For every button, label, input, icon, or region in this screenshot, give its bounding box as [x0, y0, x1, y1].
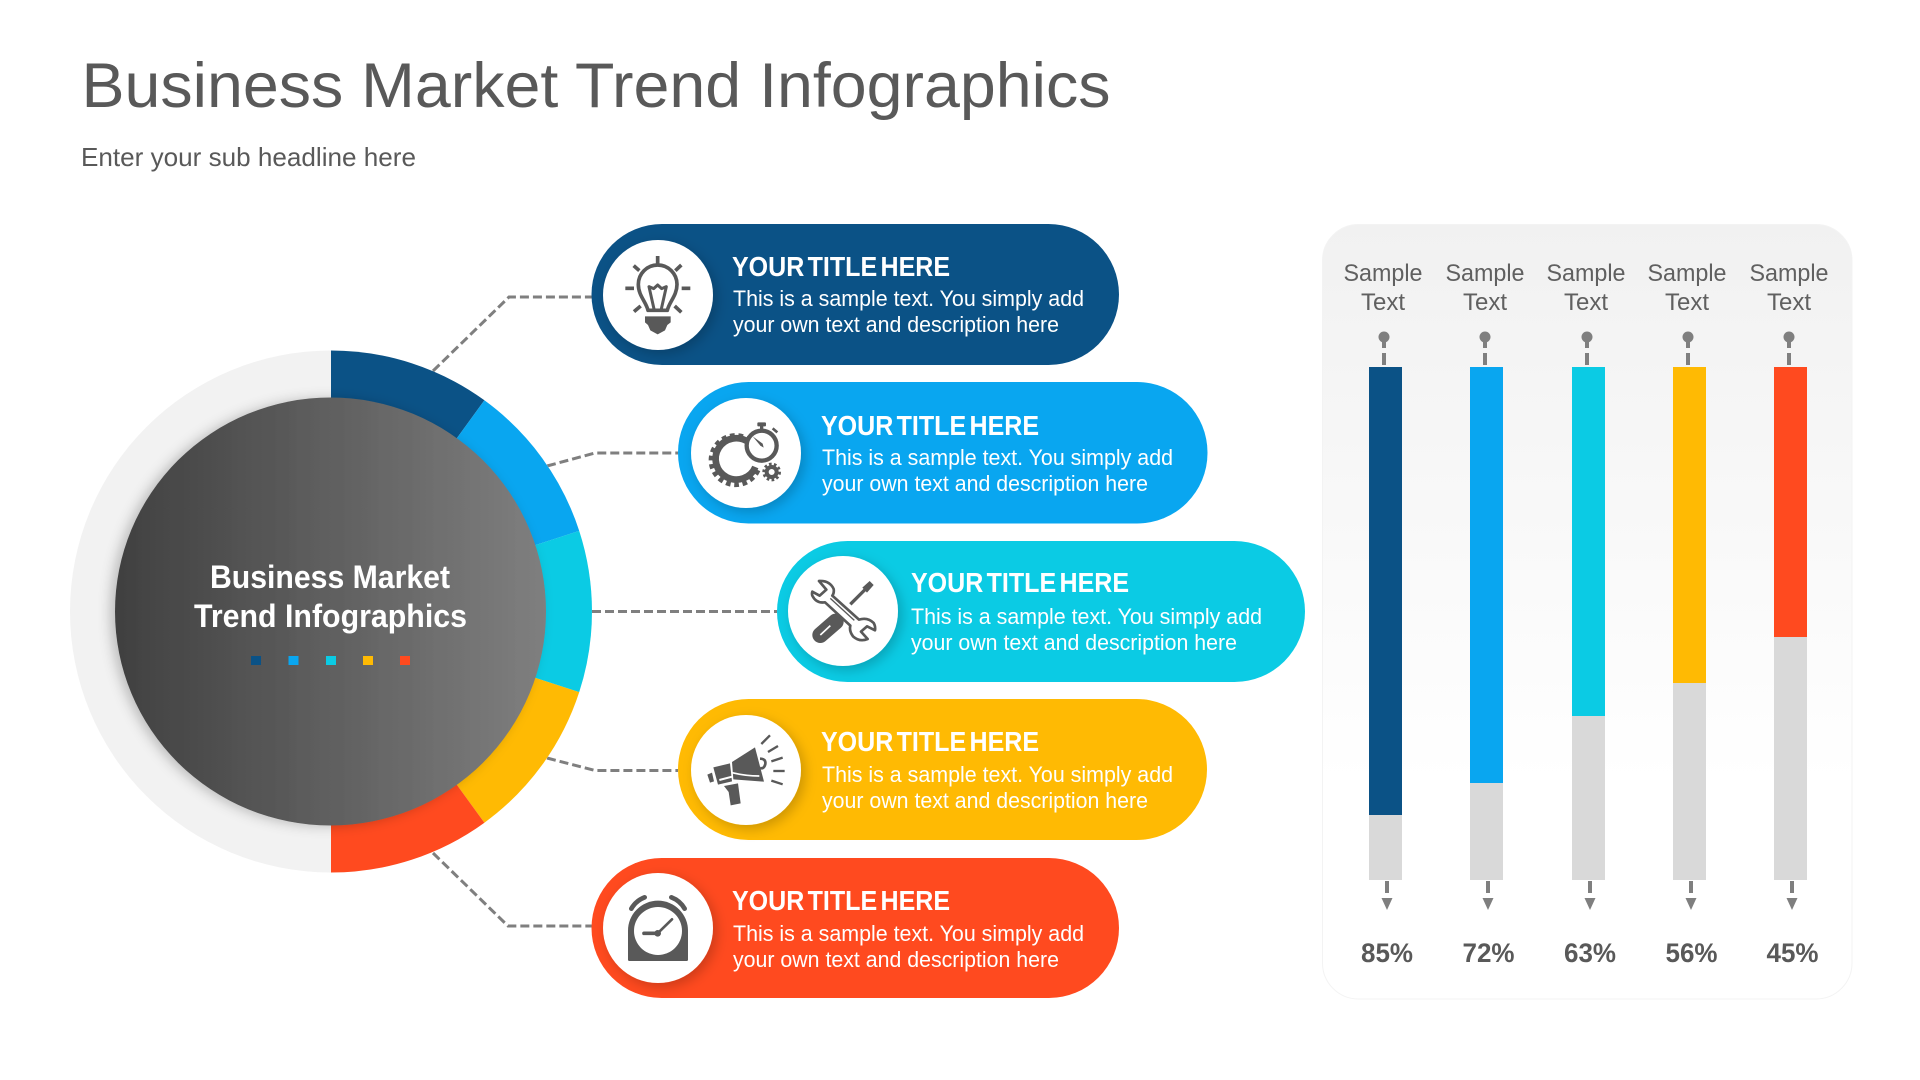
pill text: your own text and description here: [733, 947, 1059, 972]
bar column 5: 45%: [1766, 938, 1818, 968]
pill text: [732, 251, 1084, 337]
pill text: your own text and description here: [911, 630, 1237, 655]
pill text: YOUR TITLE HERE: [821, 410, 1039, 441]
bar column 1: 85%: [1361, 938, 1413, 968]
donut chart: [70, 350, 592, 873]
pill text: YOUR TITLE HERE: [821, 726, 1039, 757]
colour dots: [251, 656, 410, 665]
bar column 3: [1546, 260, 1626, 968]
bar column 4: Sample: [1648, 260, 1726, 287]
center heading: Business Market: [210, 559, 450, 595]
pill text: This is a sample text. You simply add: [733, 286, 1084, 311]
panel: pill 3: [777, 541, 1305, 682]
bar column 5: [1750, 260, 1828, 968]
pill text: [732, 885, 1084, 972]
pill text: This is a sample text. You simply add: [733, 921, 1084, 946]
icon: megaphone: [707, 735, 785, 805]
center heading: Trend Infographics: [194, 598, 467, 634]
icon: gears and stopwatch: [711, 422, 780, 485]
pill text: [821, 410, 1173, 496]
bar column 3: Text: [1564, 289, 1608, 316]
icon: wrench and screwdriver: [812, 581, 875, 640]
panel: pill 5: [592, 858, 1119, 998]
pill text: your own text and description here: [733, 312, 1059, 337]
panel: bar chart: [1322, 224, 1852, 999]
panel: pill 1: [592, 224, 1119, 365]
bar column 2: Text: [1463, 289, 1507, 316]
bar column 4: [1648, 260, 1726, 968]
bar column 1: Text: [1361, 289, 1405, 316]
icon: alarm clock: [628, 897, 688, 961]
connector lines: [433, 297, 777, 926]
pill text: YOUR TITLE HERE: [911, 567, 1129, 598]
pill text: [911, 567, 1262, 655]
pill text: YOUR TITLE HERE: [732, 251, 950, 282]
pill text: This is a sample text. You simply add: [822, 445, 1173, 470]
bar column 2: [1446, 260, 1524, 968]
bar column 5: Sample: [1750, 260, 1828, 287]
bar column 3: Sample: [1546, 260, 1626, 287]
panel: pill 4: [678, 699, 1207, 840]
bar column 4: Text: [1665, 289, 1709, 316]
icon: light bulb: [625, 256, 690, 334]
bar column 2: 72%: [1462, 938, 1514, 968]
bar column 3: 63%: [1564, 938, 1616, 968]
pill text: your own text and description here: [822, 788, 1148, 813]
center heading: [194, 559, 467, 634]
pill text: This is a sample text. You simply add: [911, 604, 1262, 629]
pill text: your own text and description here: [822, 471, 1148, 496]
center circle: [115, 398, 546, 826]
subtitle: Enter your sub headline here: [81, 142, 416, 172]
panel: pill 2: [678, 382, 1208, 524]
bar column 5: Text: [1767, 289, 1811, 316]
title: Business Market Trend Infographics: [82, 51, 1110, 121]
bar column 2: Sample: [1446, 260, 1524, 287]
pill text: This is a sample text. You simply add: [822, 762, 1173, 787]
pill text: [821, 726, 1173, 813]
pill text: YOUR TITLE HERE: [732, 885, 950, 916]
bar column 1: Sample: [1344, 260, 1422, 287]
bar column 1: [1344, 260, 1422, 968]
bar column 4: 56%: [1666, 938, 1718, 968]
